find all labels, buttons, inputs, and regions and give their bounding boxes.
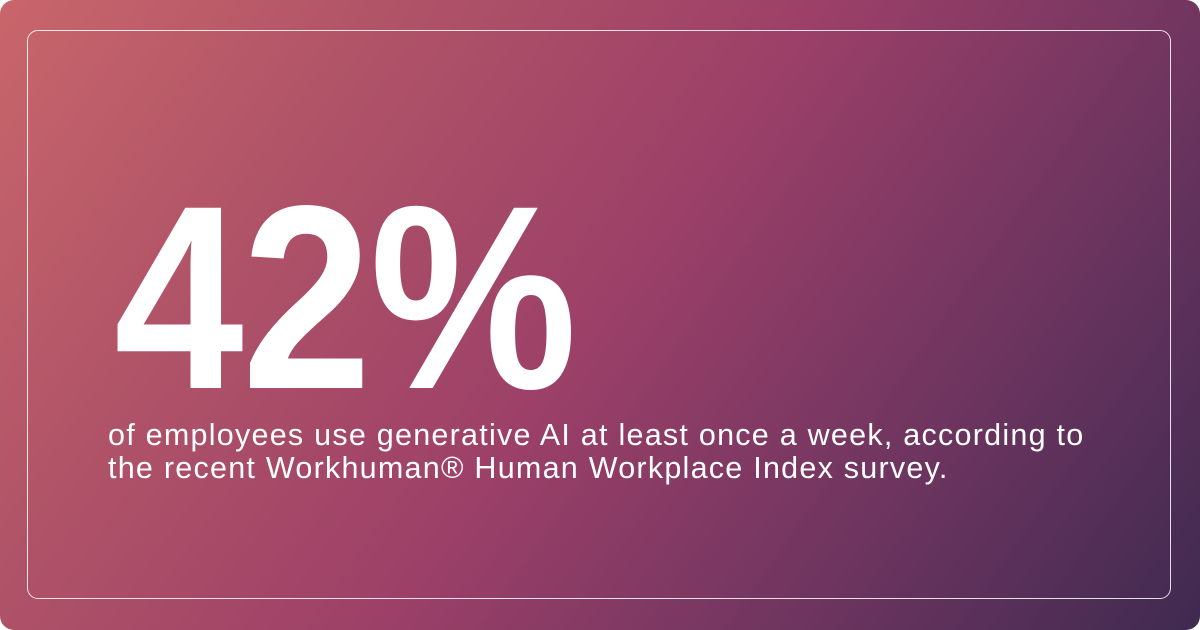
description text: of employees use generative AI at least once a week, according to (108, 418, 1084, 452)
headline stat: 42% (114, 151, 575, 444)
description text (108, 418, 1084, 485)
description text: the recent Workhuman® Human Workplace Index survey. (108, 451, 949, 485)
